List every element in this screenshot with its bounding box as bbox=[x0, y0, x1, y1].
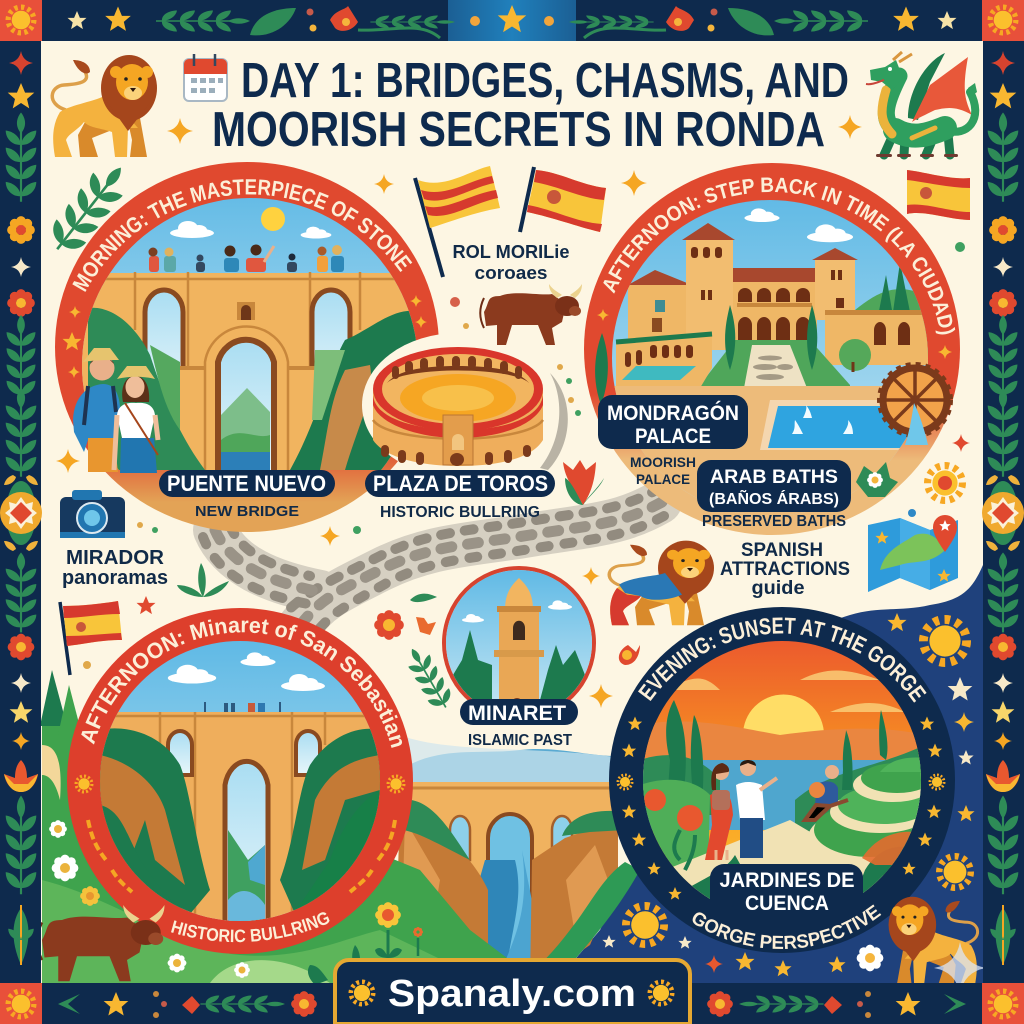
caption: flag labels: ROL MORILie bbox=[452, 242, 570, 262]
icon: dragon bbox=[866, 52, 977, 157]
caption: New Bridge: NEW BRIDGE bbox=[195, 503, 299, 520]
ring text: morning: MORNING: THE MASTERPIECE OF STONE bbox=[72, 179, 412, 292]
icon: camera bbox=[60, 490, 125, 538]
ring decorations bbox=[76, 776, 404, 892]
title: MOORISH SECRETS IN RONDA bbox=[212, 103, 825, 157]
morning scene: Puente Nuevo bbox=[82, 198, 416, 470]
caption: Moorish Palace: PALACE bbox=[636, 471, 690, 487]
pill: Mondragon Palace bbox=[598, 395, 748, 449]
green bloom ornament bbox=[856, 462, 898, 497]
pill: Mondragon Palace: PALACE bbox=[635, 425, 711, 448]
caption: Mirador panoramas: panoramas bbox=[62, 567, 168, 589]
icon: lion top left bbox=[52, 55, 157, 157]
icon: Catalan flag bbox=[415, 166, 500, 277]
small scattered dots bbox=[83, 242, 965, 669]
icon: lion bottom right bbox=[889, 897, 978, 983]
pill: Arab Baths bbox=[697, 460, 851, 512]
pill: Mondragon Palace: MONDRAGÓN bbox=[607, 401, 739, 425]
caption: Preserved Baths: PRESERVED BATHS bbox=[702, 513, 846, 530]
panel: navy night background bbox=[555, 565, 983, 983]
ring text: minaret heading: AFTERNOON: Minaret of San Sebastian bbox=[81, 619, 402, 748]
pill: Plaza de Toros: PLAZA DE TOROS bbox=[373, 471, 548, 496]
bottom left garden flowers bbox=[49, 820, 423, 985]
pill: Jardines de Cuenca: JARDINES DE bbox=[720, 869, 854, 892]
title bbox=[212, 54, 849, 157]
icon: lower-left bull bbox=[37, 905, 164, 981]
caption: flag labels: coroaes bbox=[474, 263, 548, 283]
ring text: gorge perspective: GORGE PERSPECTIVE bbox=[692, 904, 882, 949]
caption: Spanish Attractions guide bbox=[720, 540, 850, 599]
caption: Islamic Past: ISLAMIC PAST bbox=[468, 732, 572, 749]
left border ornaments bbox=[0, 51, 42, 965]
icon: Spanish flag centre bbox=[520, 167, 606, 232]
caption: Historic Bullring: HISTORIC BULLRING bbox=[380, 504, 540, 521]
ring decorations bbox=[62, 295, 427, 378]
pill: Arab Baths: (BAÑOS ÁRABS) bbox=[709, 488, 839, 508]
icon: Spanish flag right bbox=[907, 170, 970, 220]
afternoon scene: palace bbox=[612, 200, 928, 516]
panel: afternoon minaret big circle bbox=[67, 608, 413, 954]
caption: Spanish Attractions guide: ATTRACTIONS bbox=[720, 559, 850, 580]
sparkle watermark bbox=[934, 942, 986, 994]
pill: Puente Nuevo: PUENTE NUEVO bbox=[167, 471, 326, 496]
panel: afternoon Mondragon circle bbox=[584, 163, 960, 535]
top band ornaments bbox=[68, 5, 956, 38]
olive branch beside morning circle bbox=[42, 156, 136, 261]
icon: lion in Spanish colours bbox=[609, 541, 714, 625]
icon: bull centre bbox=[480, 284, 582, 345]
panel: evening circle bbox=[609, 607, 955, 953]
icon: plaza de toros bullring bbox=[362, 333, 554, 477]
panel: morning circle bbox=[55, 162, 438, 532]
right border ornaments bbox=[982, 51, 1024, 965]
scene: gorge bridge bbox=[100, 640, 380, 932]
icon: map bbox=[868, 515, 958, 592]
caption: flag labels bbox=[452, 242, 570, 283]
decorative sprigs and sparkles bbox=[42, 115, 970, 985]
ring text: historic bullring: HISTORIC BULLRING bbox=[171, 912, 330, 942]
cypress at ring edge bbox=[595, 333, 608, 405]
flowers and sprig by the minaret bbox=[374, 594, 456, 714]
icon: couple at sunset bbox=[705, 760, 848, 860]
panel: central gorge landscape with bridge bbox=[395, 735, 630, 983]
icon: calendar bbox=[184, 54, 227, 101]
icon: tourist couple bbox=[73, 348, 158, 473]
icon: water wheel bbox=[879, 364, 951, 445]
caption: Mirador panoramas bbox=[62, 547, 168, 589]
footer badge: Spanaly.com bbox=[335, 960, 690, 1024]
caption: Spanish Attractions guide: SPANISH bbox=[741, 540, 823, 561]
night sky decorations bbox=[602, 613, 975, 976]
title: DAY 1: BRIDGES, CHASMS, AND bbox=[241, 54, 849, 108]
evening scene: sunset garden bbox=[643, 641, 921, 899]
tulip and stem bbox=[563, 460, 604, 505]
ring text: evening: EVENING: SUNSET AT THE GORGE bbox=[638, 618, 926, 703]
panel: minaret circle bbox=[442, 566, 596, 700]
ring text: afternoon: AFTERNOON: STEP BACK IN TIME (LA CIUDAD) bbox=[603, 178, 956, 334]
icon: crescent beside bullring bbox=[540, 373, 568, 470]
pill: Jardines de Cuenca: CUENCA bbox=[745, 892, 829, 915]
green coastal land beneath gorge bbox=[520, 862, 640, 983]
icon: Spanish flag left bbox=[60, 601, 122, 675]
cobblestone path bbox=[203, 488, 664, 638]
footer badge: Spanaly.com: Spanaly.com bbox=[388, 973, 636, 1015]
caption: Moorish Palace bbox=[630, 454, 696, 487]
caption: Moorish Palace: MOORISH bbox=[630, 454, 696, 470]
bottom band ornaments bbox=[58, 991, 966, 1018]
pill: Jardines de Cuenca bbox=[710, 864, 863, 926]
ring stars bbox=[618, 716, 944, 900]
pill: Arab Baths: ARAB BATHS bbox=[710, 467, 838, 488]
pill: Minaret: MINARET bbox=[468, 702, 566, 725]
caption: Spanish Attractions guide: guide bbox=[752, 578, 804, 599]
panel: green hills bottom left bbox=[40, 670, 540, 983]
caption: Mirador panoramas: MIRADOR bbox=[66, 547, 165, 569]
